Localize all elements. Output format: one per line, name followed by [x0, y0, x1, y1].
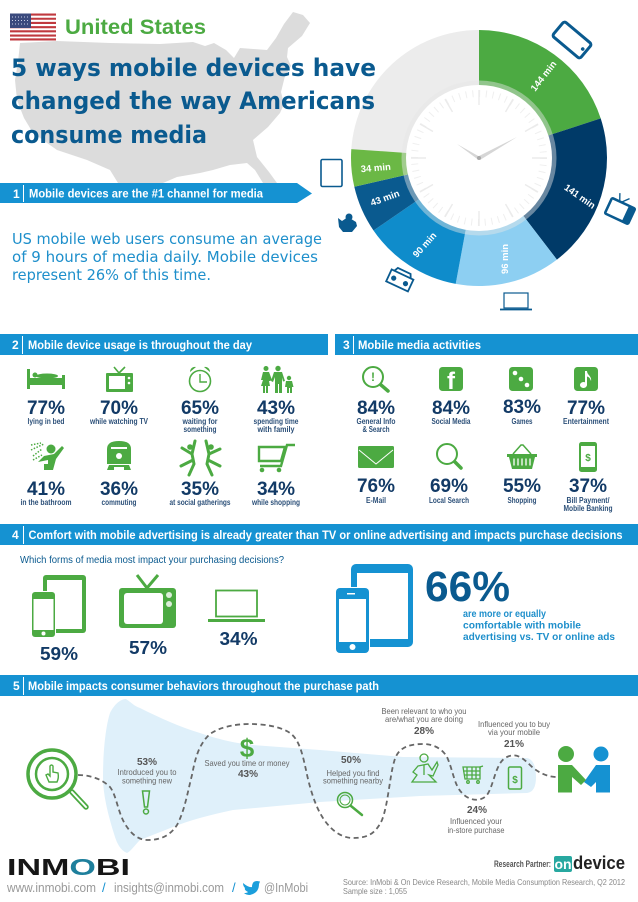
- stat: social media: Social Media: [432, 417, 471, 426]
- stat: waiting: [181, 367, 219, 434]
- stat: e-mail: [357, 446, 395, 505]
- research partner logo: device: [573, 853, 625, 873]
- stat: bill payment: $: [585, 453, 591, 464]
- step: introduced: [118, 757, 177, 814]
- stat: watching TV: while watching TV: [89, 417, 149, 426]
- stat: bill payment: Mobile Banking: [564, 504, 613, 513]
- segment: PC 96 min: [456, 215, 557, 286]
- step: saved time or money: $: [240, 733, 255, 763]
- intro paragraph: represent 26% of this time.: [12, 266, 211, 284]
- stat: waiting: something: [184, 425, 217, 434]
- stat: shopping: 34%: [257, 478, 295, 500]
- stat: bathroom: [20, 443, 72, 507]
- step: saved time or money: Saved you time or money: [204, 758, 290, 768]
- stat: entertainment: 77%: [567, 397, 605, 419]
- big stat description: advertising vs. TV or online ads: [463, 631, 615, 643]
- research partner logo: [494, 853, 625, 873]
- panel: device usage through the day: [20, 366, 300, 507]
- step: in-store purchase: Influenced your: [450, 816, 502, 826]
- step: introduced: something new: [122, 776, 173, 786]
- icon: person at desk: [412, 754, 438, 782]
- step: helped find nearby: [323, 755, 384, 815]
- stat: general info and search: 84%: [357, 397, 395, 419]
- stat: social media: 84%: [432, 397, 470, 419]
- stat: shopping basket: 55%: [503, 475, 541, 497]
- section 3 banner: Mobile media activities: [358, 338, 481, 352]
- step: influenced to buy on mobile: Influenced you to buy: [478, 719, 551, 729]
- stat: bill payment: 37%: [569, 475, 607, 497]
- stat: family: with family: [257, 425, 295, 434]
- icon: blue tablet and phone: [335, 564, 413, 654]
- segment: other 43 min: [354, 174, 420, 230]
- step: been relevant: 28%: [414, 726, 434, 737]
- stat: lying in bed: lying in bed: [28, 417, 65, 426]
- footer contact line: [6, 880, 308, 895]
- donut chart: daily media minutes: [351, 30, 607, 286]
- step: influenced to buy on mobile: 21%: [504, 739, 524, 750]
- stat: social media: [432, 367, 471, 426]
- dashed purchase path: [78, 724, 557, 840]
- source note: [343, 877, 625, 896]
- stat: shopping basket: [503, 445, 541, 505]
- stat: bathroom: 41%: [27, 478, 65, 500]
- stat: laptop 34%: 34%: [220, 628, 258, 649]
- segment: mobile 144 min: [479, 30, 601, 136]
- icon: handshake people: [558, 746, 610, 792]
- research partner logo: Research Partner:: [494, 859, 551, 869]
- source note: Sample size : 1,055: [343, 886, 407, 896]
- label: 141 min: 141 min: [562, 182, 597, 212]
- stat: family: 43%: [257, 397, 295, 419]
- step: been relevant: are/what you are doing: [385, 714, 463, 724]
- stat: local search: [429, 444, 469, 505]
- icon: green phone: [31, 591, 56, 638]
- stat: bathroom: in the bathroom: [20, 498, 72, 507]
- stat: social media: f: [447, 368, 456, 395]
- icon: tablet: [321, 160, 342, 186]
- stat: general info and search: [356, 367, 396, 434]
- section 2 banner: 2: [12, 338, 19, 352]
- icon: magnifier: [338, 792, 362, 815]
- stat: social gatherings: [170, 441, 231, 507]
- clock hands: [457, 137, 517, 160]
- panel: mobile media activities: [356, 367, 613, 513]
- section 2 banner: Mobile device usage is throughout the day: [28, 338, 252, 352]
- stat: bill payment: Bill Payment/: [566, 496, 610, 505]
- stat: commuting: [100, 441, 138, 507]
- stat: laptop 34%: [208, 590, 265, 649]
- stat: shopping: [251, 445, 300, 507]
- section 1 banner: [0, 183, 312, 203]
- section 4 banner: [0, 524, 638, 545]
- heading: country: United States: [65, 16, 206, 39]
- footer contact line: /: [232, 880, 236, 895]
- big stat description: [463, 608, 615, 643]
- title: [11, 54, 376, 149]
- stat: shopping: while shopping: [251, 498, 300, 507]
- big stat: 66%: 66%: [425, 563, 510, 611]
- segment: TV 141 min: [523, 118, 607, 260]
- stat: e-mail: E-Mail: [366, 496, 386, 505]
- stat: shopping basket: Shopping: [508, 496, 537, 505]
- section 1 banner: 1: [13, 187, 20, 201]
- stat: entertainment: [563, 367, 609, 426]
- stat: games: Games: [512, 417, 533, 426]
- stat: watching TV: 70%: [100, 397, 138, 419]
- title: 5 ways mobile devices have: [11, 54, 376, 82]
- intro paragraph: of 9 hours of media daily. Mobile devices: [12, 248, 318, 266]
- icon: phone with dollar: $: [512, 775, 518, 786]
- segment: tablet 34 min: [351, 149, 409, 187]
- icon: exclamation mark: [142, 791, 150, 814]
- stat: watching TV: [89, 367, 149, 426]
- label: 43 min: 43 min: [369, 188, 401, 209]
- stat: television 57%: [119, 575, 176, 658]
- question text: Which forms of media most impact your purchasing decisions?: [20, 554, 284, 566]
- stat: local search: Local Search: [429, 496, 469, 505]
- label: 96 min: 96 min: [500, 244, 511, 274]
- stat: tablet and phone 59%: 59%: [40, 643, 78, 664]
- footer contact line: www.inmobi.com: [6, 880, 96, 895]
- footer contact line: @InMobi: [264, 880, 308, 895]
- research partner logo: on: [554, 856, 572, 872]
- stat: bill payment: [564, 442, 613, 513]
- stat: social gatherings: 35%: [181, 478, 219, 500]
- big stat description: comfortable with mobile: [463, 620, 581, 632]
- big stat description: are more or equally: [463, 608, 546, 620]
- icon: green tablet: [43, 575, 86, 633]
- segment: idle remainder: [351, 30, 479, 153]
- stat: e-mail: 76%: [357, 475, 395, 497]
- stat: games: [503, 367, 541, 426]
- step: influenced to buy on mobile: [478, 719, 551, 789]
- clock face: [402, 80, 556, 236]
- icon: twitter bird: [243, 881, 260, 895]
- stat: family: [254, 366, 299, 434]
- intro paragraph: [12, 230, 322, 284]
- section 5 banner: 5: [13, 679, 20, 693]
- label: 144 min: 144 min: [529, 59, 559, 94]
- step: in-store purchase: in-store purchase: [448, 825, 505, 835]
- stat: lying in bed: 77%: [27, 397, 65, 419]
- icon: radio: [386, 266, 415, 291]
- stat: television 57%: 57%: [129, 637, 167, 658]
- label: 34 min: 34 min: [360, 162, 391, 175]
- icon: US flag: [10, 14, 56, 40]
- stat: commuting: commuting: [102, 498, 137, 507]
- stat: waiting: 65%: [181, 397, 219, 419]
- section 1 banner: Mobile devices are the #1 channel for media: [29, 186, 263, 200]
- step: introduced: Introduced you to: [118, 767, 177, 777]
- footer contact line: insights@inmobi.com: [114, 880, 224, 895]
- stat: social gatherings: at social gatherings: [170, 498, 231, 507]
- section 2 banner: [0, 334, 328, 355]
- stat: local search: 69%: [430, 475, 468, 497]
- stat: general info and search: General Info: [356, 417, 396, 426]
- step: in-store purchase: [448, 805, 505, 835]
- logo: InMobi: INM O BI: [7, 854, 130, 880]
- funnel background: [103, 699, 536, 853]
- intro paragraph: US mobile web users consume an average: [12, 230, 322, 248]
- footer contact line: /: [102, 880, 106, 895]
- step: helped find nearby: Helped you find: [326, 768, 380, 778]
- segment: radio 90 min: [374, 199, 466, 284]
- step: saved time or money: 43%: [238, 769, 258, 780]
- stat: waiting: waiting for: [182, 417, 218, 426]
- title: changed the way Americans: [11, 87, 375, 115]
- step: helped find nearby: something nearby: [323, 776, 384, 786]
- stat: tablet and phone 59%: [31, 575, 86, 664]
- stat: family: spending time: [254, 417, 299, 426]
- label: 90 min: 90 min: [411, 230, 439, 260]
- step: been relevant: Been relevant to who you: [382, 706, 467, 716]
- stat: entertainment: Entertainment: [563, 417, 609, 426]
- step: helped find nearby: 50%: [341, 755, 361, 766]
- section 3 banner: [335, 334, 638, 355]
- map of the United States: [15, 12, 310, 183]
- icon: laptop: [500, 293, 532, 310]
- stat: general info and search: & Search: [362, 425, 390, 434]
- icon: other media: [338, 214, 357, 232]
- section 3 banner: 3: [343, 338, 350, 352]
- section 5 banner: [0, 675, 638, 696]
- step: influenced to buy on mobile: via your mobile: [488, 727, 540, 737]
- icon: shopping cart: [463, 766, 483, 783]
- stat: commuting: 36%: [100, 478, 138, 500]
- stat: games: 83%: [503, 396, 541, 418]
- stat: lying in bed: [27, 369, 65, 426]
- icon: television: [605, 191, 638, 224]
- icon: smartphone: [552, 21, 592, 59]
- section 4 banner: 4: [12, 528, 19, 542]
- title: consume media: [11, 121, 207, 149]
- icon: magnifier with hand: [28, 750, 86, 807]
- step: in-store purchase: 24%: [467, 805, 487, 816]
- step: introduced: 53%: [137, 757, 157, 768]
- section 5 banner: Mobile impacts consumer behaviors throughout the purchase path: [28, 679, 379, 693]
- step: been relevant: [382, 706, 467, 782]
- step: saved time or money: [204, 733, 290, 780]
- stat: general info and search: !: [371, 370, 375, 384]
